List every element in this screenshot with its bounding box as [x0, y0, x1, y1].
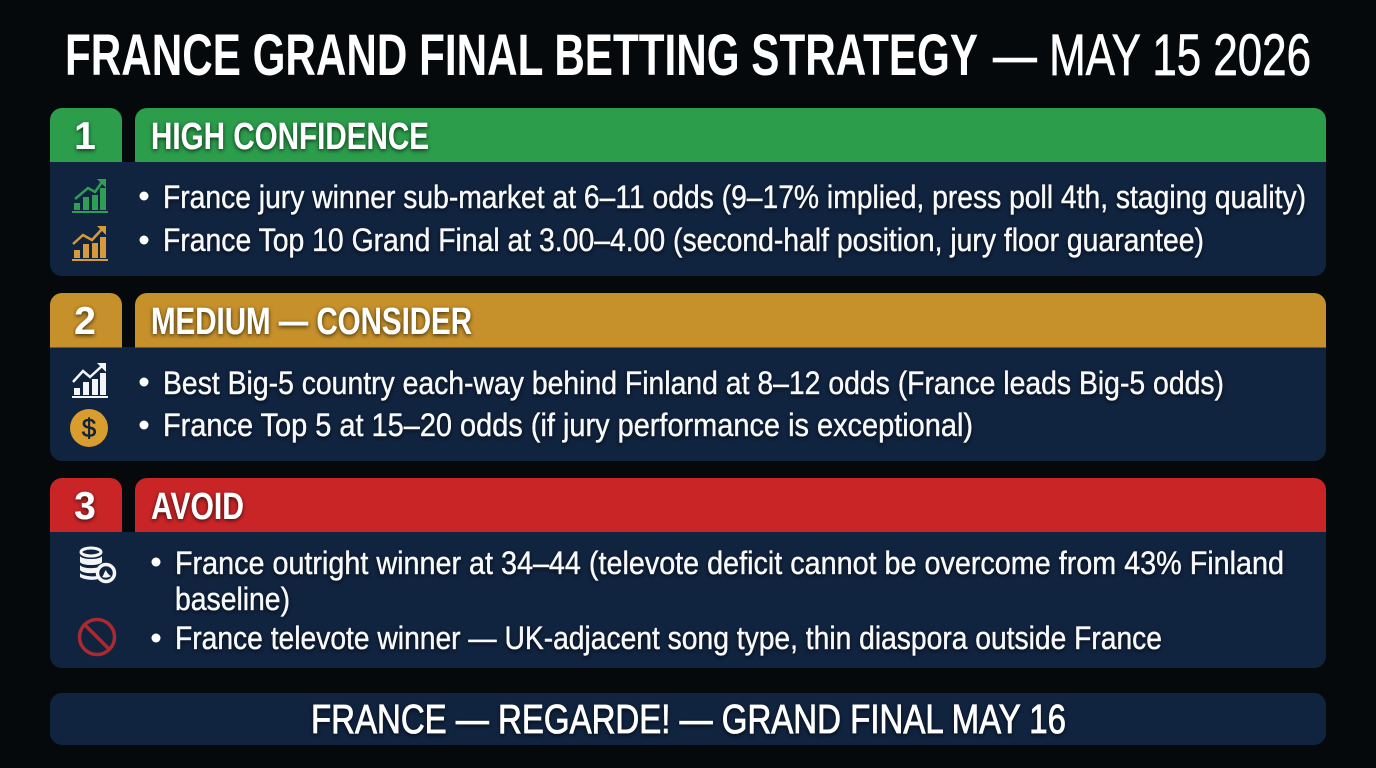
bullet: televote winner: France televote winner — UK-adjacent song type, thin diaspora outside France — [175, 620, 1162, 656]
bullet: top 5: France Top 5 at 15–20 odds (if jury performance is exceptional) — [163, 407, 973, 443]
icon: white chart — [72, 363, 108, 398]
panel: avoid — [50, 478, 1326, 668]
icon: coin stack — [80, 548, 114, 582]
heading: high confidence — [135, 108, 1326, 162]
bullet: outright winner — [152, 545, 1284, 617]
icon: green chart — [72, 179, 108, 213]
panel: medium consider — [50, 293, 1326, 461]
heading: medium consider: MEDIUM — CONSIDER — [151, 301, 472, 343]
footer banner — [50, 693, 1326, 745]
bullet: outright winner: baseline) — [175, 581, 290, 617]
title: FRANCE GRAND FINAL BETTING STRATEGY — [65, 23, 978, 88]
icon: dollar coin: $ — [82, 413, 97, 443]
number tab 1: 1 — [74, 115, 96, 158]
icon: gold chart — [72, 226, 108, 261]
icon: dollar coin — [70, 409, 108, 447]
heading: avoid: AVOID — [151, 486, 244, 528]
number tab 3: 3 — [74, 485, 96, 528]
bullet: top 10: France Top 10 Grand Final at 3.00–4.00 (second-half position, jury floor guarantee) — [163, 222, 1204, 258]
heading: high confidence: HIGH CONFIDENCE — [151, 116, 429, 158]
icon: prohibited sign — [80, 620, 114, 654]
panel: high confidence — [50, 108, 1326, 276]
footer banner: FRANCE — REGARDE! — GRAND FINAL MAY 16 — [311, 696, 1066, 742]
number tab 2 — [50, 293, 122, 348]
heading: medium consider — [135, 293, 1326, 348]
heading: avoid — [135, 478, 1326, 532]
number tab 3 — [50, 478, 122, 532]
bullet: outright winner: France outright winner at 34–44 (televote deficit cannot be overcome from 43% Finland — [175, 545, 1284, 581]
number tab 2: 2 — [74, 300, 96, 343]
bullet: best big-5: Best Big-5 country each-way behind Finland at 8–12 odds (France leads Big-5 odds) — [163, 365, 1224, 401]
number tab 1 — [50, 108, 122, 162]
